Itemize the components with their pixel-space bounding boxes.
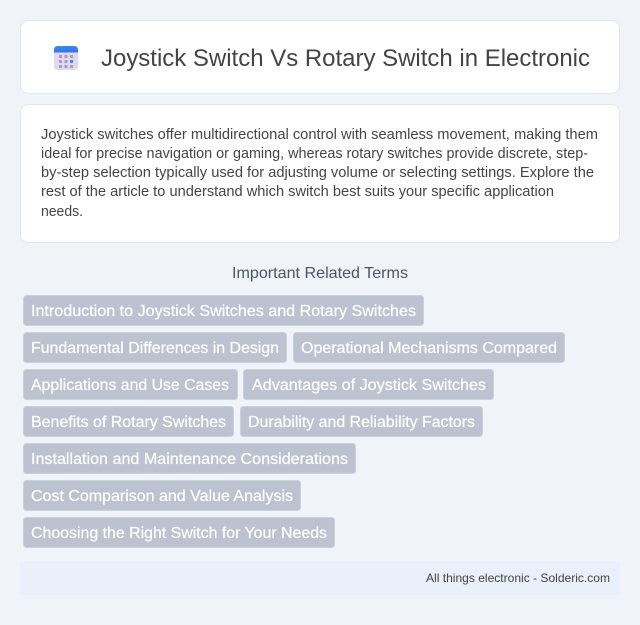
tag: applications: [24, 370, 238, 400]
tag: durability: [240, 406, 482, 436]
tag: installation: Installation and Maintenance Considerations: [31, 451, 348, 468]
text block: introduction: rest of the article to understand which switch best suits your specific application: [41, 184, 554, 200]
text block: introduction: Joystick switches offer multidirectional control with seamless movement, making them: [41, 127, 598, 143]
footer: [20, 561, 620, 595]
tags: related terms: [24, 296, 564, 548]
tag: durability: Durability and Reliability Factors: [248, 414, 475, 431]
icon: calendar: [54, 46, 78, 70]
tag: advantages: Advantages of Joystick Switches: [252, 377, 486, 394]
footer credit: All things electronic - Solderic.com: [426, 571, 610, 585]
panel: title header: [20, 20, 620, 94]
tag: benefits: [24, 406, 234, 436]
tag: cost comparison: Cost Comparison and Value Analysis: [31, 488, 293, 505]
tag: choosing: Choosing the Right Switch for Your Needs: [31, 525, 327, 542]
tag: benefits: Benefits of Rotary Switches: [31, 414, 226, 431]
tag: fundamental differences: Fundamental Differences in Design: [31, 340, 279, 357]
tag: introduction: Introduction to Joystick Switches and Rotary Switches: [31, 303, 416, 320]
text block: introduction: by-step selection typically used for adjusting volume or selecting settings. Explore the: [41, 165, 594, 181]
tag: applications: Applications and Use Cases: [31, 377, 229, 394]
title: Joystick Switch Vs Rotary Switch in Electronic: [101, 45, 590, 72]
tag: operational mechanisms: Operational Mechanisms Compared: [301, 340, 557, 357]
panel: introduction: [20, 104, 620, 242]
tag: advantages: [244, 370, 494, 400]
tag: installation: [24, 444, 356, 474]
text block: introduction: [41, 127, 598, 220]
tag: operational mechanisms: [294, 332, 564, 362]
tag: introduction: [24, 296, 424, 326]
text block: introduction: ideal for precise navigation or gaming, whereas rotary switches provide discrete, step-: [41, 146, 588, 162]
heading: related terms: Important Related Terms: [232, 265, 408, 282]
tag: choosing: [24, 518, 334, 548]
tag: cost comparison: [24, 480, 300, 510]
text block: introduction: needs.: [41, 204, 83, 220]
tag: fundamental differences: [24, 332, 286, 362]
